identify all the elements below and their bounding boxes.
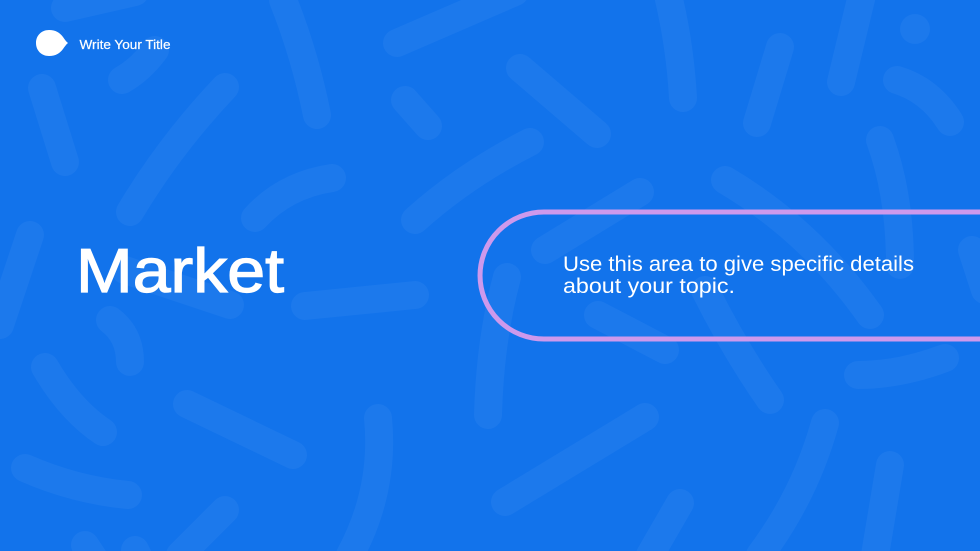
icon: logo drop bbox=[36, 30, 68, 56]
callout outline bbox=[480, 212, 980, 339]
callout text: about your topic. bbox=[563, 274, 735, 298]
slide label: Write Your Title bbox=[80, 38, 171, 52]
heading: Market: Market bbox=[76, 237, 284, 306]
callout text: Use this area to give specific details bbox=[563, 252, 914, 276]
callout text bbox=[563, 252, 914, 298]
